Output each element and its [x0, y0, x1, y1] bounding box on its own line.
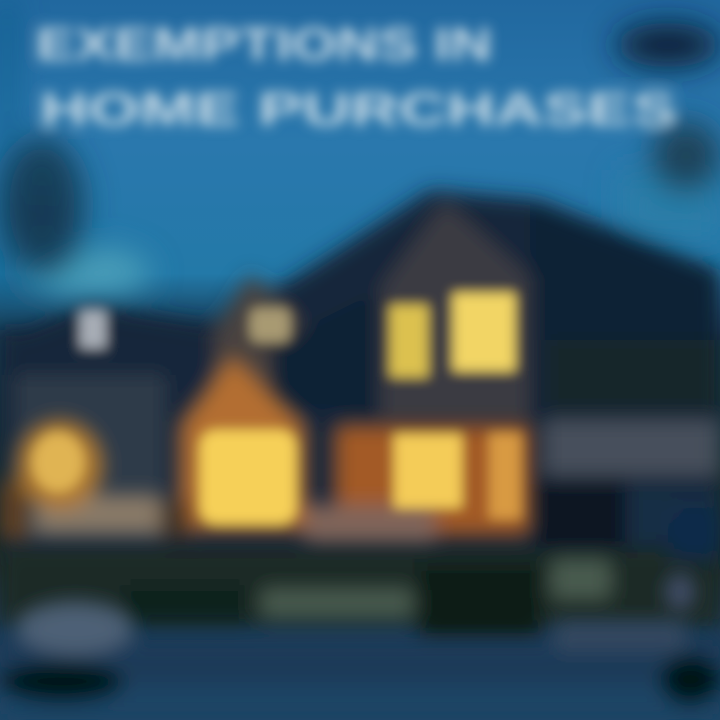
- house silhouette: [0, 190, 720, 560]
- trees left and right: [0, 23, 720, 273]
- title line 1: EXEMPTIONS IN: [36, 18, 492, 70]
- lit windows: [32, 293, 521, 524]
- title line 2: HOME PURCHASES: [40, 83, 676, 135]
- street: [0, 510, 720, 720]
- garden and hedge: [0, 550, 720, 640]
- title: [36, 18, 676, 135]
- lower storey warm wall: [0, 355, 530, 543]
- sky glow: [0, 0, 720, 300]
